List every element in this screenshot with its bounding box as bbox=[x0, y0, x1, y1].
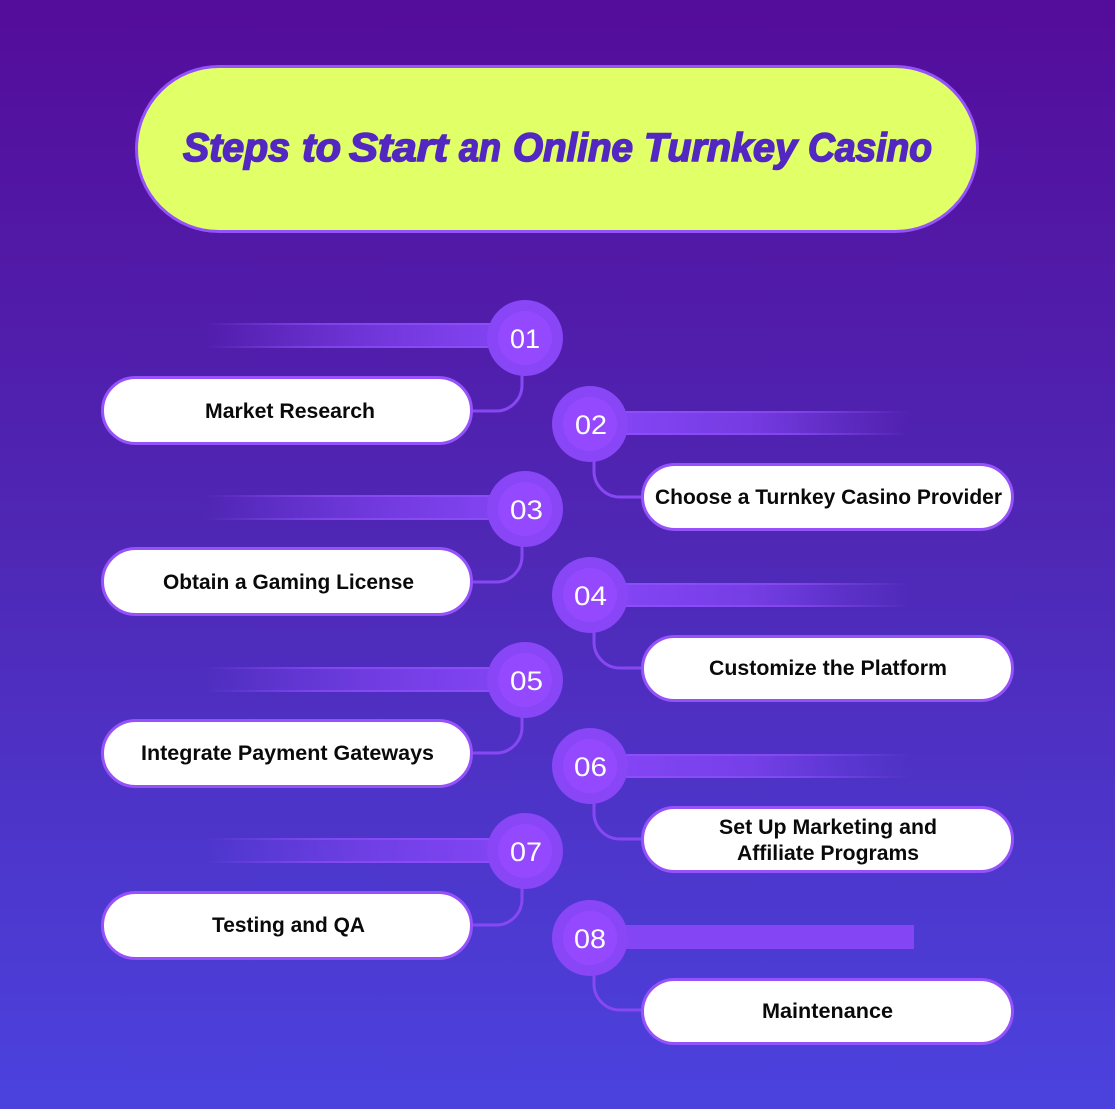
bar 02 bbox=[620, 411, 910, 435]
number badge 07 bbox=[487, 813, 563, 889]
title banner: Online bbox=[513, 126, 633, 170]
label pill 05: Integrate Payment Gateways bbox=[141, 742, 434, 765]
number badge 07: 07 bbox=[510, 837, 542, 867]
label pill 04 bbox=[642, 636, 1012, 700]
connector 08 bbox=[594, 974, 643, 1010]
title banner: Steps bbox=[183, 126, 290, 170]
title banner: Turnkey bbox=[644, 126, 799, 170]
label pill 05 bbox=[102, 720, 472, 786]
label pill 06 bbox=[642, 808, 1012, 872]
connector 07 bbox=[472, 888, 522, 925]
connector 06 bbox=[594, 802, 643, 839]
number badge 03: 03 bbox=[510, 495, 543, 525]
number badge 03 bbox=[487, 471, 563, 547]
bar 08 bbox=[620, 925, 914, 949]
title banner: Casino bbox=[808, 126, 932, 170]
bar 07 bbox=[205, 838, 495, 863]
bar 03 bbox=[205, 495, 495, 520]
label pill 01: Market Research bbox=[205, 400, 375, 423]
number badge 05 bbox=[487, 642, 563, 718]
label pill 08 bbox=[642, 980, 1012, 1044]
label pill 06: Affiliate Programs bbox=[737, 842, 919, 865]
title banner: Start bbox=[349, 126, 450, 170]
step 02 bbox=[552, 386, 1012, 530]
number badge 06 bbox=[552, 728, 628, 804]
step 08 bbox=[552, 900, 1012, 1044]
number badge 06: 06 bbox=[574, 752, 607, 782]
number badge 04: 04 bbox=[574, 581, 607, 611]
step 06 bbox=[552, 728, 1012, 872]
label pill 03: Obtain a Gaming License bbox=[163, 571, 414, 594]
step 01 bbox=[102, 300, 563, 444]
step 05 bbox=[102, 642, 563, 786]
label pill 02: Choose a Turnkey Casino Provider bbox=[655, 486, 1002, 509]
number badge 01 bbox=[487, 300, 563, 376]
step 04 bbox=[552, 557, 1012, 700]
title banner: an bbox=[459, 126, 501, 170]
connector 02 bbox=[594, 460, 643, 497]
step 07 bbox=[102, 813, 563, 958]
number badge 01: 01 bbox=[510, 324, 540, 354]
bar 06 bbox=[620, 754, 910, 778]
number badge 08: 08 bbox=[574, 924, 606, 954]
bar 04 bbox=[620, 583, 910, 607]
number badge 08 bbox=[552, 900, 628, 976]
connector 03 bbox=[472, 546, 522, 582]
number badge 02: 02 bbox=[575, 410, 607, 440]
label pill 07 bbox=[102, 892, 472, 958]
label pill 06: Set Up Marketing and bbox=[719, 816, 937, 839]
connector 01 bbox=[472, 375, 522, 411]
number badge 05: 05 bbox=[510, 666, 543, 696]
number badge 02 bbox=[552, 386, 628, 462]
label pill 03 bbox=[102, 548, 472, 614]
step 03 bbox=[102, 471, 563, 614]
label pill 01 bbox=[102, 378, 472, 444]
label pill 02 bbox=[642, 464, 1012, 530]
title banner bbox=[136, 66, 978, 232]
title banner: to bbox=[302, 126, 341, 170]
bar 01 bbox=[205, 323, 495, 348]
label pill 08: Maintenance bbox=[762, 1000, 893, 1023]
label pill 04: Customize the Platform bbox=[709, 657, 947, 680]
number badge 04 bbox=[552, 557, 628, 633]
bar 05 bbox=[205, 667, 495, 692]
connector 05 bbox=[472, 717, 522, 753]
label pill 07: Testing and QA bbox=[212, 914, 365, 937]
connector 04 bbox=[594, 631, 643, 668]
